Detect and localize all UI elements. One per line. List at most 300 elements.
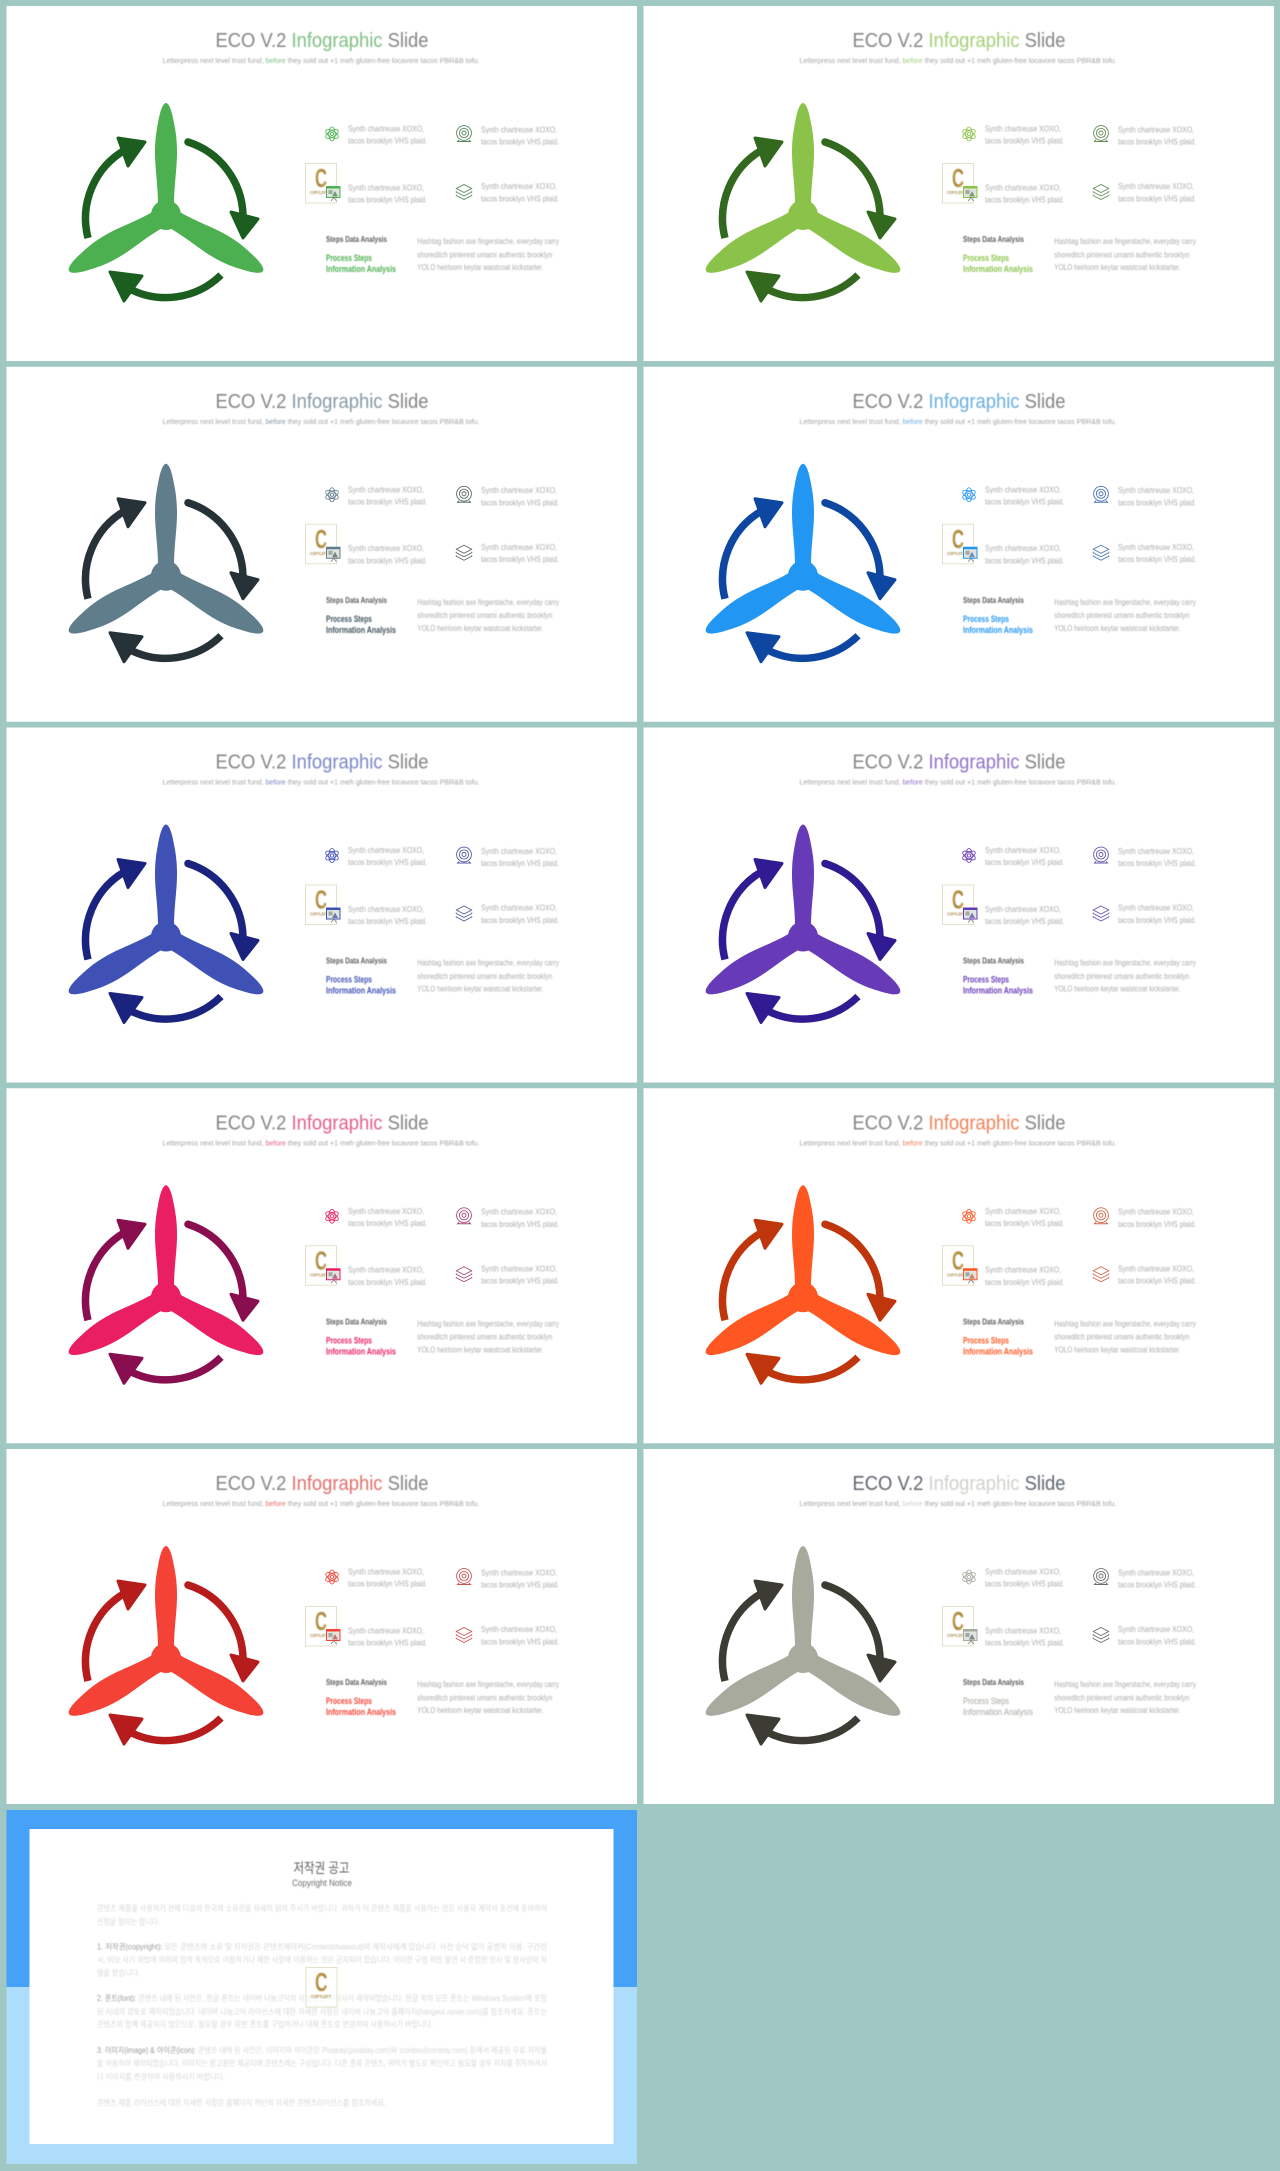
circular arrows: [86, 138, 258, 301]
paragraph 2: font: 된 시내의 검토로 제작되었습니다. 네이버 나눔고딕 라이선스에 대한 자세한 사항은 네이버 나눔고딕 홈페이지(hangeul.naver.com)를 참조하세요. 폰트는: [97, 2007, 547, 2017]
steps labels: Process Steps: [326, 974, 372, 984]
feature: target: tacos brooklyn VHS plaid.: [481, 137, 559, 147]
feature: logo row: [348, 182, 427, 205]
intro paragraph: 신청을 알리는 합니다.: [97, 1917, 160, 1927]
description: [1054, 598, 1196, 633]
panel: slide 5 indigo: [6, 728, 637, 1082]
description: shoreditch pinterest umami authentic brooklyn: [1054, 1333, 1189, 1342]
steps labels: Steps Data Analysis: [963, 595, 1024, 605]
propeller fan: [700, 1546, 906, 1725]
feature: stack: tacos brooklyn VHS plaid.: [481, 1636, 559, 1646]
feature: logo row: tacos brooklyn VHS plaid.: [985, 195, 1064, 205]
subtitle: Letterpress next level trust fund, before they sold out +1 meh gluten-free locavore tacos PBR&B tofu.: [800, 417, 1116, 426]
steps labels: Steps Data Analysis: [963, 1316, 1024, 1326]
logo watermark: C: [315, 163, 327, 193]
description: YOLO heirloom keytar waistcoat kickstarter.: [1054, 624, 1180, 633]
logo watermark: COPYLEFT: [947, 1633, 965, 1638]
feature: logo row: tacos brooklyn VHS plaid.: [348, 1638, 427, 1648]
feature: atom: [961, 1206, 1064, 1228]
feature: stack: tacos brooklyn VHS plaid.: [1118, 554, 1196, 564]
description: YOLO heirloom keytar waistcoat kickstarter.: [1054, 984, 1180, 994]
feature: stack: tacos brooklyn VHS plaid.: [481, 1276, 559, 1286]
feature: atom: [324, 1567, 427, 1589]
feature: atom: [324, 845, 427, 867]
description: [1054, 1319, 1196, 1354]
intro paragraph: [97, 1903, 547, 1927]
feature: stack: Synth chartreuse XOXO,: [1118, 542, 1194, 552]
feature: atom: tacos brooklyn VHS plaid.: [348, 1579, 427, 1589]
logo watermark: COPYLEFT: [310, 551, 328, 556]
feature: target: [457, 846, 559, 868]
feature: target: Synth chartreuse XOXO,: [1118, 124, 1194, 134]
logo watermark: [942, 163, 977, 203]
steps labels: Information Analysis: [326, 1707, 396, 1717]
steps labels: [326, 956, 396, 996]
description: shoreditch pinterest umami authentic brooklyn: [1054, 972, 1189, 981]
feature: logo row: tacos brooklyn VHS plaid.: [985, 1277, 1064, 1287]
steps labels: Process Steps: [326, 1335, 372, 1345]
propeller fan: [700, 1185, 906, 1364]
steps labels: [963, 1316, 1033, 1356]
feature: target: Synth chartreuse XOXO,: [1118, 1567, 1194, 1577]
title: ECO V.2 Infographic Slide: [852, 1112, 1066, 1134]
feature: atom: tacos brooklyn VHS plaid.: [985, 1579, 1064, 1589]
paragraph 3: image and icon: 다 이미지를 변경하여 사용하시기 바랍니다.: [97, 2072, 225, 2082]
feature: atom: [961, 1567, 1064, 1589]
propeller fan: [63, 464, 269, 643]
description: Hashtag fashion axe fingerstache, everyday carry: [417, 237, 559, 246]
logo watermark: COPYLEFT: [947, 551, 965, 556]
feature: target: tacos brooklyn VHS plaid.: [1118, 137, 1196, 147]
steps labels: Information Analysis: [326, 264, 396, 274]
propeller fan: [63, 103, 269, 282]
feature: target: tacos brooklyn VHS plaid.: [1118, 497, 1196, 507]
title: ECO V.2 Infographic Slide: [852, 30, 1066, 52]
feature: logo row: [985, 182, 1064, 205]
steps labels: Process Steps: [326, 614, 372, 624]
description: Hashtag fashion axe fingerstache, everyday carry: [417, 598, 559, 607]
feature: logo row: [985, 543, 1064, 565]
description: Hashtag fashion axe fingerstache, everyday carry: [417, 958, 559, 968]
circular arrows: [723, 860, 895, 1022]
title: ECO V.2 Infographic Slide: [852, 752, 1066, 774]
description: [1054, 237, 1196, 272]
feature: stack: [1093, 1624, 1196, 1646]
steps labels: Information Analysis: [326, 986, 396, 996]
logo watermark: [942, 884, 977, 924]
feature: atom: Synth chartreuse XOXO,: [985, 845, 1061, 855]
description: YOLO heirloom keytar waistcoat kickstarter.: [1054, 1345, 1180, 1354]
description: [1054, 1680, 1196, 1715]
paragraph 2: font: [97, 1993, 548, 2029]
title: ECO V.2 Infographic Slide: [216, 391, 428, 413]
feature: atom: [961, 484, 1064, 506]
feature: target: tacos brooklyn VHS plaid.: [481, 497, 559, 507]
steps labels: [326, 234, 396, 274]
feature: logo row: Synth chartreuse XOXO,: [348, 1625, 424, 1635]
description: YOLO heirloom keytar waistcoat kickstarter.: [417, 624, 543, 633]
steps labels: [326, 595, 396, 635]
subtitle: Letterpress next level trust fund, before they sold out +1 meh gluten-free locavore tacos PBR&B tofu.: [800, 1138, 1116, 1147]
steps labels: Information Analysis: [963, 1346, 1033, 1356]
feature: stack: Synth chartreuse XOXO,: [1118, 1263, 1194, 1273]
title: ECO V.2 Infographic Slide: [852, 1473, 1066, 1495]
propeller fan: [63, 824, 269, 1004]
logo watermark: C: [315, 1606, 327, 1636]
circular arrows: [86, 1220, 258, 1383]
panel: slide 6 purple: [644, 728, 1274, 1082]
feature: stack: Synth chartreuse XOXO,: [481, 1263, 557, 1273]
circular arrows: [86, 499, 258, 662]
feature: logo row: Synth chartreuse XOXO,: [348, 1265, 424, 1275]
circular arrows: [86, 1581, 258, 1744]
title: ECO V.2 Infographic Slide: [216, 1473, 428, 1495]
logo watermark: [306, 1606, 340, 1646]
steps labels: Steps Data Analysis: [326, 595, 387, 605]
title: ECO V.2 Infographic Slide: [852, 391, 1066, 413]
feature: target: Synth chartreuse XOXO,: [1118, 485, 1194, 495]
feature: logo row: [985, 1625, 1064, 1648]
description: shoreditch pinterest umami authentic brooklyn: [417, 972, 552, 981]
feature: stack: [1093, 1263, 1196, 1286]
feature: atom: Synth chartreuse XOXO,: [985, 1567, 1061, 1577]
steps labels: Process Steps: [963, 253, 1009, 263]
description: Hashtag fashion axe fingerstache, everyday carry: [1054, 1319, 1196, 1328]
feature: target: [1094, 1567, 1196, 1590]
feature: target: [1094, 1207, 1196, 1229]
description: [417, 1319, 559, 1354]
subtitle: Letterpress next level trust fund, before they sold out +1 meh gluten-free locavore tacos PBR&B tofu.: [162, 1138, 480, 1147]
circular arrows: [723, 138, 895, 301]
feature: logo row: [985, 1265, 1064, 1287]
description: [417, 598, 559, 633]
description: YOLO heirloom keytar waistcoat kickstarter.: [1054, 1706, 1180, 1715]
title: ECO V.2 Infographic Slide: [216, 30, 428, 52]
logo watermark: C: [315, 1245, 327, 1275]
description: YOLO heirloom keytar waistcoat kickstarter.: [417, 1345, 543, 1354]
feature: target: Synth chartreuse XOXO,: [1118, 1207, 1194, 1217]
feature: target: Synth chartreuse XOXO,: [481, 1207, 557, 1217]
steps labels: Process Steps: [963, 1335, 1009, 1345]
feature: target: [457, 1207, 559, 1229]
propeller fan: [700, 103, 906, 282]
steps labels: Steps Data Analysis: [326, 956, 387, 966]
subtitle: Letterpress next level trust fund, before they sold out +1 meh gluten-free locavore tacos PBR&B tofu.: [162, 56, 480, 65]
steps labels: Process Steps: [963, 614, 1009, 624]
feature: stack: [456, 542, 559, 564]
feature: atom: [961, 845, 1064, 867]
feature: logo row: [348, 1625, 427, 1648]
description: YOLO heirloom keytar waistcoat kickstarter.: [417, 263, 543, 272]
feature: atom: Synth chartreuse XOXO,: [348, 484, 424, 494]
subtitle: Letterpress next level trust fund, before they sold out +1 meh gluten-free locavore tacos PBR&B tofu.: [800, 1499, 1116, 1508]
feature: stack: [1093, 542, 1196, 564]
panel: slide 4 blue: [644, 367, 1274, 722]
copyright subheading: Copyright Notice: [292, 1878, 352, 1888]
description: Hashtag fashion axe fingerstache, everyday carry: [417, 1680, 559, 1689]
subtitle: Letterpress next level trust fund, before they sold out +1 meh gluten-free locavore tacos PBR&B tofu.: [800, 778, 1116, 786]
paragraph 1: copyright: 시, 비보 사기 위법에 의하여 엄히 목적으로 이용하거나 제한 사항에 이용하는 것은 금지되어 있습니다. 이러한 규범 위반 발견 시 준엄한 민사 및 형사상의 처: [97, 1954, 547, 1964]
feature: stack: tacos brooklyn VHS plaid.: [481, 193, 559, 203]
logo watermark: COPYLEFT: [310, 1272, 328, 1277]
circular arrows: [723, 1581, 895, 1744]
feature: logo row: [348, 904, 427, 926]
logo watermark: COPYLEFT: [310, 912, 328, 916]
feature: stack: [1093, 902, 1196, 925]
paragraph 1: copyright: 1. 저작권(copyright): 모든 콘텐츠의 소유 및 저작권은 콘텐츠메이커(Contentstvawout)의 제작사에게 있습니다. 사전 승낙 없이 공범적 이용, 구간전: [97, 1942, 547, 1952]
logo watermark: C: [952, 884, 964, 914]
logo watermark: C: [315, 1967, 328, 1997]
logo watermark: COPYLEFT: [947, 912, 965, 916]
feature: logo row: Synth chartreuse XOXO,: [348, 182, 424, 192]
feature: atom: tacos brooklyn VHS plaid.: [348, 1218, 427, 1228]
description: shoreditch pinterest umami authentic brooklyn: [417, 1693, 552, 1702]
circular arrows: [723, 499, 895, 662]
feature: target: [457, 1567, 559, 1590]
logo watermark: COPYLEFT: [310, 1633, 328, 1638]
paragraph 3: image and icon: 을 이용하여 제작되었습니다. 이미지는 참고용만 제공되며 콘텐츠에는 구성됩니다. 다른 종류 콘텐츠, 귀하가 별도로 확인하고 필요할 경우 저자를 취득하셔서: [97, 2058, 547, 2068]
steps labels: [963, 234, 1033, 274]
panel: slide 8 orange: [644, 1088, 1274, 1443]
feature: stack: Synth chartreuse XOXO,: [1118, 902, 1194, 912]
description: shoreditch pinterest umami authentic brooklyn: [1054, 250, 1189, 259]
feature: logo row: Synth chartreuse XOXO,: [985, 543, 1061, 553]
feature: atom: tacos brooklyn VHS plaid.: [348, 496, 427, 506]
logo watermark: COPYLEFT: [310, 190, 328, 195]
description: shoreditch pinterest umami authentic brooklyn: [417, 1333, 552, 1342]
feature: target: Synth chartreuse XOXO,: [481, 124, 557, 134]
steps labels: [326, 1677, 396, 1717]
feature: stack: [456, 181, 559, 203]
logo watermark: C: [952, 163, 964, 193]
propeller fan: [63, 1546, 269, 1725]
logo watermark: C: [952, 524, 964, 554]
feature: stack: tacos brooklyn VHS plaid.: [1118, 1276, 1196, 1286]
feature: stack: tacos brooklyn VHS plaid.: [1118, 193, 1196, 203]
logo watermark: C: [315, 884, 327, 914]
propeller fan: [700, 464, 906, 643]
feature: atom: Synth chartreuse XOXO,: [348, 845, 424, 855]
feature: target: tacos brooklyn VHS plaid.: [1118, 1219, 1196, 1229]
propeller fan: [63, 1185, 269, 1364]
feature: logo row: tacos brooklyn VHS plaid.: [348, 195, 427, 205]
feature: target: Synth chartreuse XOXO,: [481, 1567, 557, 1577]
logo watermark: C: [952, 1245, 964, 1275]
steps labels: [326, 1316, 396, 1356]
description: shoreditch pinterest umami authentic brooklyn: [417, 250, 552, 259]
feature: stack: tacos brooklyn VHS plaid.: [1118, 915, 1196, 925]
description: Hashtag fashion axe fingerstache, everyday carry: [1054, 958, 1196, 968]
feature: atom: tacos brooklyn VHS plaid.: [348, 857, 427, 867]
feature: logo row: Synth chartreuse XOXO,: [985, 182, 1061, 192]
feature: stack: Synth chartreuse XOXO,: [481, 181, 557, 191]
feature: logo row: [348, 1265, 427, 1287]
description: [417, 958, 559, 994]
copyright heading: 저작권 공고: [294, 1860, 350, 1876]
subtitle: Letterpress next level trust fund, before they sold out +1 meh gluten-free locavore tacos PBR&B tofu.: [162, 778, 480, 786]
logo watermark: [306, 884, 340, 924]
steps labels: [963, 595, 1033, 635]
description: [417, 1680, 559, 1715]
description: YOLO heirloom keytar waistcoat kickstarter.: [417, 984, 543, 994]
feature: atom: [324, 124, 427, 146]
paragraph 2: font: 콘텐츠의 함께 제공되지 않으므로, 필요할 경우 원본 폰트를 구입하거나 대체 폰트로 변경하여 사용하시기 바랍니다.: [97, 2019, 433, 2029]
feature: atom: Synth chartreuse XOXO,: [348, 124, 424, 134]
feature: target: tacos brooklyn VHS plaid.: [481, 1580, 559, 1590]
feature: target: tacos brooklyn VHS plaid.: [481, 1219, 559, 1229]
feature: atom: Synth chartreuse XOXO,: [985, 124, 1061, 134]
title: ECO V.2 Infographic Slide: [216, 752, 428, 774]
steps labels: Information Analysis: [963, 986, 1033, 996]
steps labels: Steps Data Analysis: [963, 1677, 1024, 1687]
feature: atom: tacos brooklyn VHS plaid.: [985, 1218, 1064, 1228]
feature: atom: tacos brooklyn VHS plaid.: [985, 857, 1064, 867]
logo watermark: [942, 524, 977, 564]
subtitle: Letterpress next level trust fund, before they sold out +1 meh gluten-free locavore tacos PBR&B tofu.: [162, 1499, 480, 1508]
feature: logo row: tacos brooklyn VHS plaid.: [348, 555, 427, 565]
description: [1054, 958, 1196, 994]
feature: stack: tacos brooklyn VHS plaid.: [1118, 1636, 1196, 1646]
feature: target: Synth chartreuse XOXO,: [481, 846, 557, 856]
feature: atom: [324, 484, 427, 506]
feature: atom: Synth chartreuse XOXO,: [348, 1206, 424, 1216]
logo watermark: [306, 1245, 340, 1285]
feature: logo row: Synth chartreuse XOXO,: [348, 543, 424, 553]
feature: stack: Synth chartreuse XOXO,: [481, 902, 557, 912]
logo watermark: C: [952, 1606, 964, 1636]
description: [417, 237, 559, 272]
description: Hashtag fashion axe fingerstache, everyday carry: [417, 1319, 559, 1328]
feature: atom: Synth chartreuse XOXO,: [348, 1567, 424, 1577]
feature: stack: [456, 1263, 559, 1286]
feature: target: tacos brooklyn VHS plaid.: [1118, 858, 1196, 868]
paragraph 3: image and icon: [97, 2045, 547, 2082]
feature: atom: [961, 124, 1064, 146]
steps labels: Process Steps: [326, 1696, 372, 1706]
feature: stack: Synth chartreuse XOXO,: [1118, 181, 1194, 191]
logo watermark: [306, 524, 340, 564]
intro paragraph: 콘텐츠 제품을 사용하기 전에 다음의 한국의 소유권을 자세히 읽어 주시기 바랍니다. 귀하가 이 콘텐츠 제품을 사용하는 것은 사용자 계약서 조건에 동의하여: [97, 1903, 547, 1913]
feature: target: [1094, 124, 1196, 147]
panel: slide 7 pink: [6, 1088, 637, 1443]
description: YOLO heirloom keytar waistcoat kickstarter.: [417, 1706, 543, 1715]
paragraph 1: copyright: 벌을 받습니다.: [97, 1968, 140, 1978]
steps labels: Process Steps: [326, 253, 372, 263]
steps labels: Steps Data Analysis: [326, 1677, 387, 1687]
feature: logo row: tacos brooklyn VHS plaid.: [985, 1638, 1064, 1648]
feature: target: tacos brooklyn VHS plaid.: [481, 858, 559, 868]
feature: target: [1094, 485, 1196, 507]
feature: logo row: tacos brooklyn VHS plaid.: [985, 555, 1064, 565]
feature: atom: tacos brooklyn VHS plaid.: [985, 496, 1064, 506]
feature: atom: Synth chartreuse XOXO,: [985, 1206, 1061, 1216]
steps labels: Steps Data Analysis: [326, 1316, 387, 1326]
feature: target: Synth chartreuse XOXO,: [1118, 846, 1194, 856]
steps labels: Steps Data Analysis: [963, 234, 1024, 244]
steps labels: Steps Data Analysis: [963, 956, 1024, 966]
description: Hashtag fashion axe fingerstache, everyday carry: [1054, 1680, 1196, 1689]
logo watermark: [306, 163, 340, 203]
circular arrows: [86, 860, 258, 1022]
feature: target: [1094, 846, 1196, 868]
steps labels: Steps Data Analysis: [326, 234, 387, 244]
logo watermark: COPYLEFT: [311, 1994, 331, 1999]
feature: logo row: tacos brooklyn VHS plaid.: [985, 916, 1064, 926]
description: shoreditch pinterest umami authentic brooklyn: [417, 611, 552, 620]
feature: stack: [1093, 181, 1196, 203]
feature: atom: tacos brooklyn VHS plaid.: [348, 136, 427, 146]
feature: logo row: Synth chartreuse XOXO,: [348, 904, 424, 914]
paragraph 1: copyright: [97, 1942, 547, 1978]
steps labels: Information Analysis: [963, 625, 1033, 635]
feature: stack: Synth chartreuse XOXO,: [1118, 1624, 1194, 1634]
description: Hashtag fashion axe fingerstache, everyday carry: [1054, 598, 1196, 607]
steps labels: Information Analysis: [963, 264, 1033, 274]
closing line: 콘텐츠 제품 라이선스에 대한 자세한 사항은 홈페이지 하단의 자세한 콘텐츠라이선스를 참조하세요.: [97, 2098, 386, 2108]
description: shoreditch pinterest umami authentic brooklyn: [1054, 611, 1189, 620]
subtitle: Letterpress next level trust fund, before they sold out +1 meh gluten-free locavore tacos PBR&B tofu.: [162, 417, 480, 426]
feature: target: Synth chartreuse XOXO,: [481, 485, 557, 495]
logo watermark: [306, 1967, 337, 2007]
title: ECO V.2 Infographic Slide: [216, 1112, 428, 1134]
panel: slide 3 slate: [6, 367, 637, 722]
logo watermark: COPYLEFT: [947, 1272, 965, 1277]
feature: stack: tacos brooklyn VHS plaid.: [481, 915, 559, 925]
feature: atom: tacos brooklyn VHS plaid.: [985, 136, 1064, 146]
feature: atom: Synth chartreuse XOXO,: [985, 484, 1061, 494]
feature: logo row: tacos brooklyn VHS plaid.: [348, 1277, 427, 1287]
description: YOLO heirloom keytar waistcoat kickstarter.: [1054, 263, 1180, 272]
steps labels: Process Steps: [963, 1696, 1009, 1706]
steps labels: Information Analysis: [326, 625, 396, 635]
steps labels: Information Analysis: [963, 1707, 1033, 1717]
feature: logo row: tacos brooklyn VHS plaid.: [348, 916, 427, 926]
description: Hashtag fashion axe fingerstache, everyday carry: [1054, 237, 1196, 246]
steps labels: [963, 956, 1033, 996]
panel: slide 2 lime: [644, 6, 1274, 361]
feature: stack: Synth chartreuse XOXO,: [481, 542, 557, 552]
feature: logo row: Synth chartreuse XOXO,: [985, 1625, 1061, 1635]
feature: logo row: [985, 904, 1064, 926]
feature: logo row: Synth chartreuse XOXO,: [985, 904, 1061, 914]
feature: target: tacos brooklyn VHS plaid.: [1118, 1580, 1196, 1590]
feature: logo row: Synth chartreuse XOXO,: [985, 1265, 1061, 1275]
logo watermark: COPYLEFT: [947, 190, 965, 195]
panel: slide 10 neutral: [644, 1449, 1274, 1804]
paragraph 2: font: 2. 폰트(font): 콘텐츠 내에 된 사인은, 한글 폰트는 네이버 나눔고딕의 서명 또는 저작사이 제작되었습니다. 한글 외의 모든 폰트는 Windows System에 포함: [97, 1993, 548, 2003]
feature: atom: [324, 1206, 427, 1228]
propeller fan: [700, 824, 906, 1004]
feature: stack: [456, 1624, 559, 1646]
steps labels: Information Analysis: [326, 1346, 396, 1356]
paragraph 3: image and icon: 3. 이미지(image) & 아이콘(icon): 콘텐츠 내에 된 사인은, 이미지와 아이콘은 Pixabay(pixabay.com)와 Iconboy(iconboy.com) 등에서 제공된 무료 저작물: [97, 2045, 547, 2055]
feature: target: [457, 124, 559, 147]
subtitle: Letterpress next level trust fund, before they sold out +1 meh gluten-free locavore tacos PBR&B tofu.: [800, 56, 1116, 65]
logo watermark: [942, 1606, 977, 1646]
feature: stack: tacos brooklyn VHS plaid.: [481, 554, 559, 564]
feature: target: [457, 485, 559, 507]
panel: copyright notice: [6, 1810, 637, 2164]
steps labels: [963, 1677, 1033, 1717]
steps labels: Process Steps: [963, 974, 1009, 984]
panel: slide 9 red: [6, 1449, 637, 1804]
feature: stack: [456, 902, 559, 925]
panel: slide 1 green: [6, 6, 637, 361]
feature: logo row: [348, 543, 427, 565]
description: shoreditch pinterest umami authentic brooklyn: [1054, 1693, 1189, 1702]
circular arrows: [723, 1220, 895, 1383]
feature: stack: Synth chartreuse XOXO,: [481, 1624, 557, 1634]
